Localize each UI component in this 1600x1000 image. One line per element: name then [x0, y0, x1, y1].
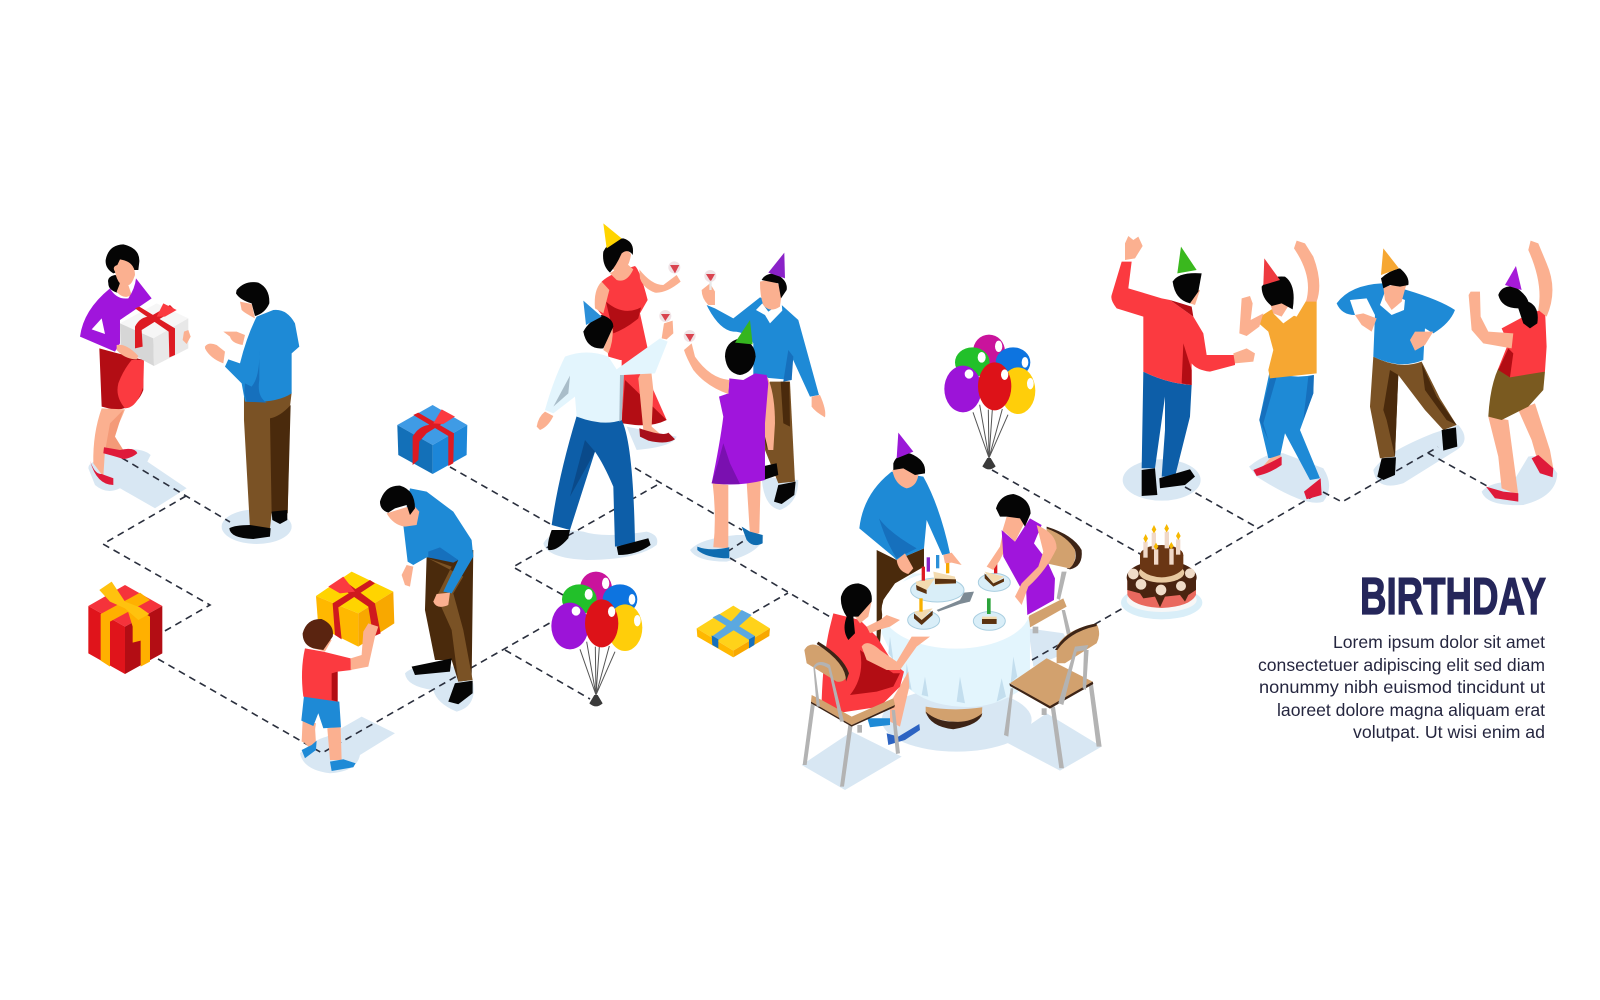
wine glass: [668, 261, 680, 273]
body text: Lorem ipsum dolor sit amet: [1333, 632, 1545, 652]
chair: left: [803, 642, 900, 787]
icon: blue gift with red ribbon: [397, 405, 467, 474]
icon: birthday cake with candles: [1121, 524, 1202, 619]
person: dancing man in blue sweater: [1337, 248, 1457, 480]
table scene: round table, chairs and guests: [803, 433, 1102, 787]
person: woman holding gift: [80, 244, 191, 485]
person: woman in red dress toasting: [595, 223, 681, 443]
icon: flat gold gift with blue ribbon: [697, 606, 770, 657]
floor shadows: [88, 425, 1557, 790]
chair: right back: [1027, 527, 1082, 637]
person: boy handing over yellow gift: [301, 572, 394, 771]
balloons bunch right: [944, 335, 1035, 469]
person: woman seated right in purple: [987, 494, 1057, 615]
person: dancing woman in red top and brown skirt: [1469, 241, 1553, 502]
wine glass: [684, 330, 696, 342]
dashed flow connectors: [103, 447, 1487, 753]
body text: consectetuer adipiscing elit sed diam: [1258, 655, 1545, 675]
wine glass: [704, 270, 716, 290]
gift: white box with red ribbon: [117, 303, 191, 366]
person: man in white shirt toasting: [537, 301, 673, 555]
person: dancing woman in yellow top: [1239, 241, 1322, 499]
person: man standing behind table: [859, 433, 950, 643]
body text: volutpat. Ut wisi enim ad: [1353, 722, 1545, 742]
body text: nonummy nibh euismod tincidunt ut: [1259, 677, 1545, 697]
person: dancing man in red shirt: [1111, 236, 1255, 496]
table with cloth: [882, 570, 1030, 729]
cake plates and slices: [908, 553, 1010, 630]
person: man in blue sweater toasting: [702, 253, 825, 504]
body text: laoreet dolore magna aliquam erat: [1277, 700, 1545, 720]
person: man bending over: [380, 486, 473, 704]
wine glass: [659, 310, 671, 322]
icon: red gift with yellow ribbon: [88, 582, 162, 674]
person: man in blue sweater receiving gift: [205, 282, 299, 539]
balloons bunch left: [551, 572, 642, 706]
person: woman in purple dress toasting: [684, 320, 775, 558]
person: woman seated left in red: [822, 583, 930, 745]
body text: [1258, 632, 1545, 742]
gift: yellow box with red ribbon: [316, 572, 394, 647]
chair: right front: [1004, 623, 1102, 768]
